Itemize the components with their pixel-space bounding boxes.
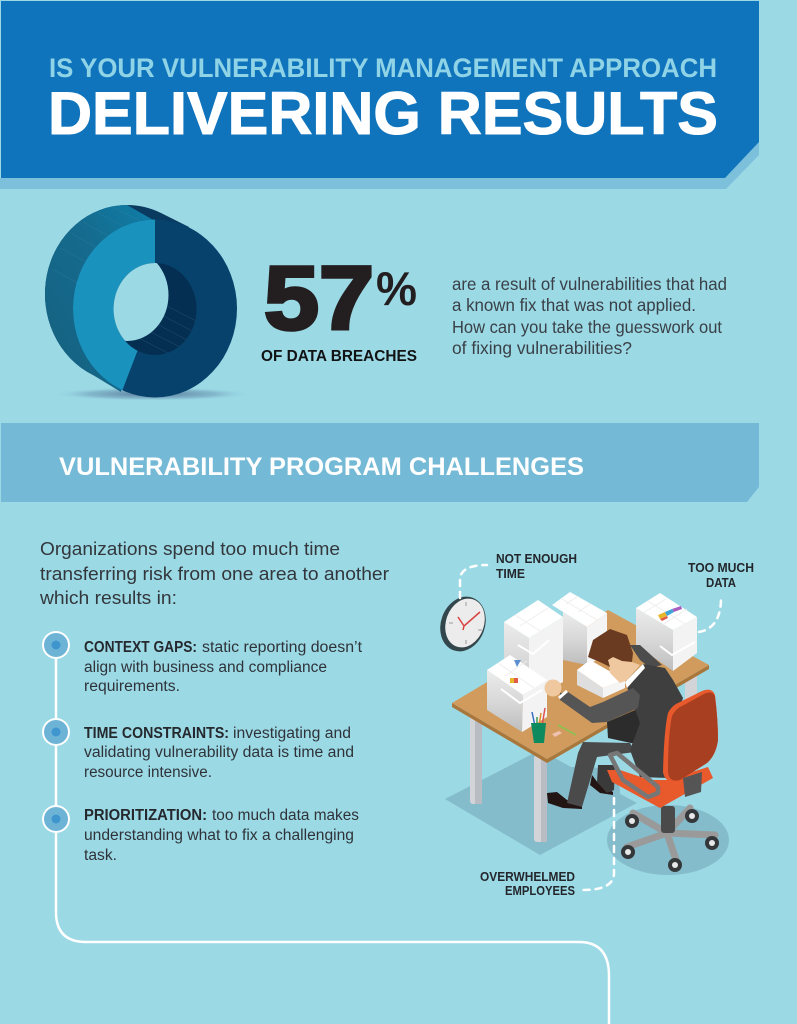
item: context gaps <box>84 639 363 695</box>
dashed callout lines <box>460 565 721 890</box>
item: prioritization: task. <box>84 847 117 864</box>
man's legs and shoes <box>547 708 640 809</box>
paper stack C <box>636 593 697 671</box>
timeline node 2 <box>42 718 70 746</box>
statistic description: of fixing vulnerabilities? <box>452 338 632 358</box>
timeline node 1 <box>42 631 70 659</box>
chair base <box>622 806 718 872</box>
item: prioritization: understanding what to fix a challenging <box>84 827 354 844</box>
item: time constraints: resource intensive. <box>84 764 212 781</box>
section band <box>1 423 759 502</box>
timeline node 3 <box>42 805 70 833</box>
statistic label: OF DATA BREACHES <box>261 348 417 365</box>
paper stack A <box>504 600 563 702</box>
small paper stack under head <box>577 660 625 698</box>
paper stack B <box>552 592 607 665</box>
callout: not enough time: NOT ENOUGH <box>496 552 577 566</box>
floor shadows <box>445 750 729 875</box>
item: context gaps: requirements. <box>84 678 180 695</box>
paper stack D <box>487 655 547 732</box>
header banner <box>0 1 759 189</box>
intro text: Organizations spend too much time <box>40 538 340 559</box>
section heading: VULNERABILITY PROGRAM CHALLENGES <box>59 453 584 481</box>
item: time constraints <box>84 725 354 781</box>
statistic description <box>452 274 727 358</box>
wall clock <box>433 590 493 658</box>
item: context gaps: CONTEXT GAPS: <box>84 639 197 656</box>
title line 2: DELIVERING RESULTS <box>48 80 718 147</box>
chair back and arm rest <box>610 690 718 797</box>
item: prioritization <box>84 807 359 864</box>
intro text <box>39 538 389 608</box>
callout: too much data: DATA <box>706 576 736 590</box>
statistic description: are a result of vulnerabilities that had <box>452 274 727 294</box>
timeline connector <box>56 645 609 1024</box>
item: time constraints: validating vulnerability data is time and <box>84 744 354 761</box>
callout: overwhelmed employees <box>480 870 575 898</box>
callout: not enough time: TIME <box>496 567 525 581</box>
callout: overwhelmed employees: OVERWHELMED <box>480 870 575 884</box>
intro text: transferring risk from one area to another <box>40 563 389 584</box>
percent sign: % <box>376 262 417 315</box>
callout: overwhelmed employees: EMPLOYEES <box>505 884 575 898</box>
statistic 57% <box>261 249 417 365</box>
title line 1: IS YOUR VULNERABILITY MANAGEMENT APPROACH <box>49 53 717 83</box>
item: context gaps: static reporting doesn’t <box>202 639 363 656</box>
callout: not enough time <box>496 552 577 581</box>
item: context gaps: align with business and compliance <box>84 659 327 676</box>
statistic description: How can you take the guesswork out <box>452 317 722 337</box>
statistic description: a known fix that was not applied. <box>452 295 696 315</box>
callout: too much data <box>688 561 754 590</box>
pen cup with pens, pencil and eraser <box>531 708 576 743</box>
item: time constraints: TIME CONSTRAINTS: <box>84 725 229 742</box>
desk <box>452 610 709 842</box>
illustration: overwhelmed employee at desk <box>433 565 729 890</box>
item: prioritization: PRIORITIZATION: <box>84 807 207 824</box>
callout: too much data: TOO MUCH <box>688 561 754 575</box>
item: prioritization: too much data makes <box>212 807 359 824</box>
statistic 57%: 57 <box>264 249 374 349</box>
chair seat <box>607 767 713 808</box>
intro text: which results in: <box>39 587 177 608</box>
item: time constraints: investigating and <box>233 725 351 742</box>
3D donut chart <box>44 205 237 400</box>
man's torso and head <box>544 629 683 778</box>
